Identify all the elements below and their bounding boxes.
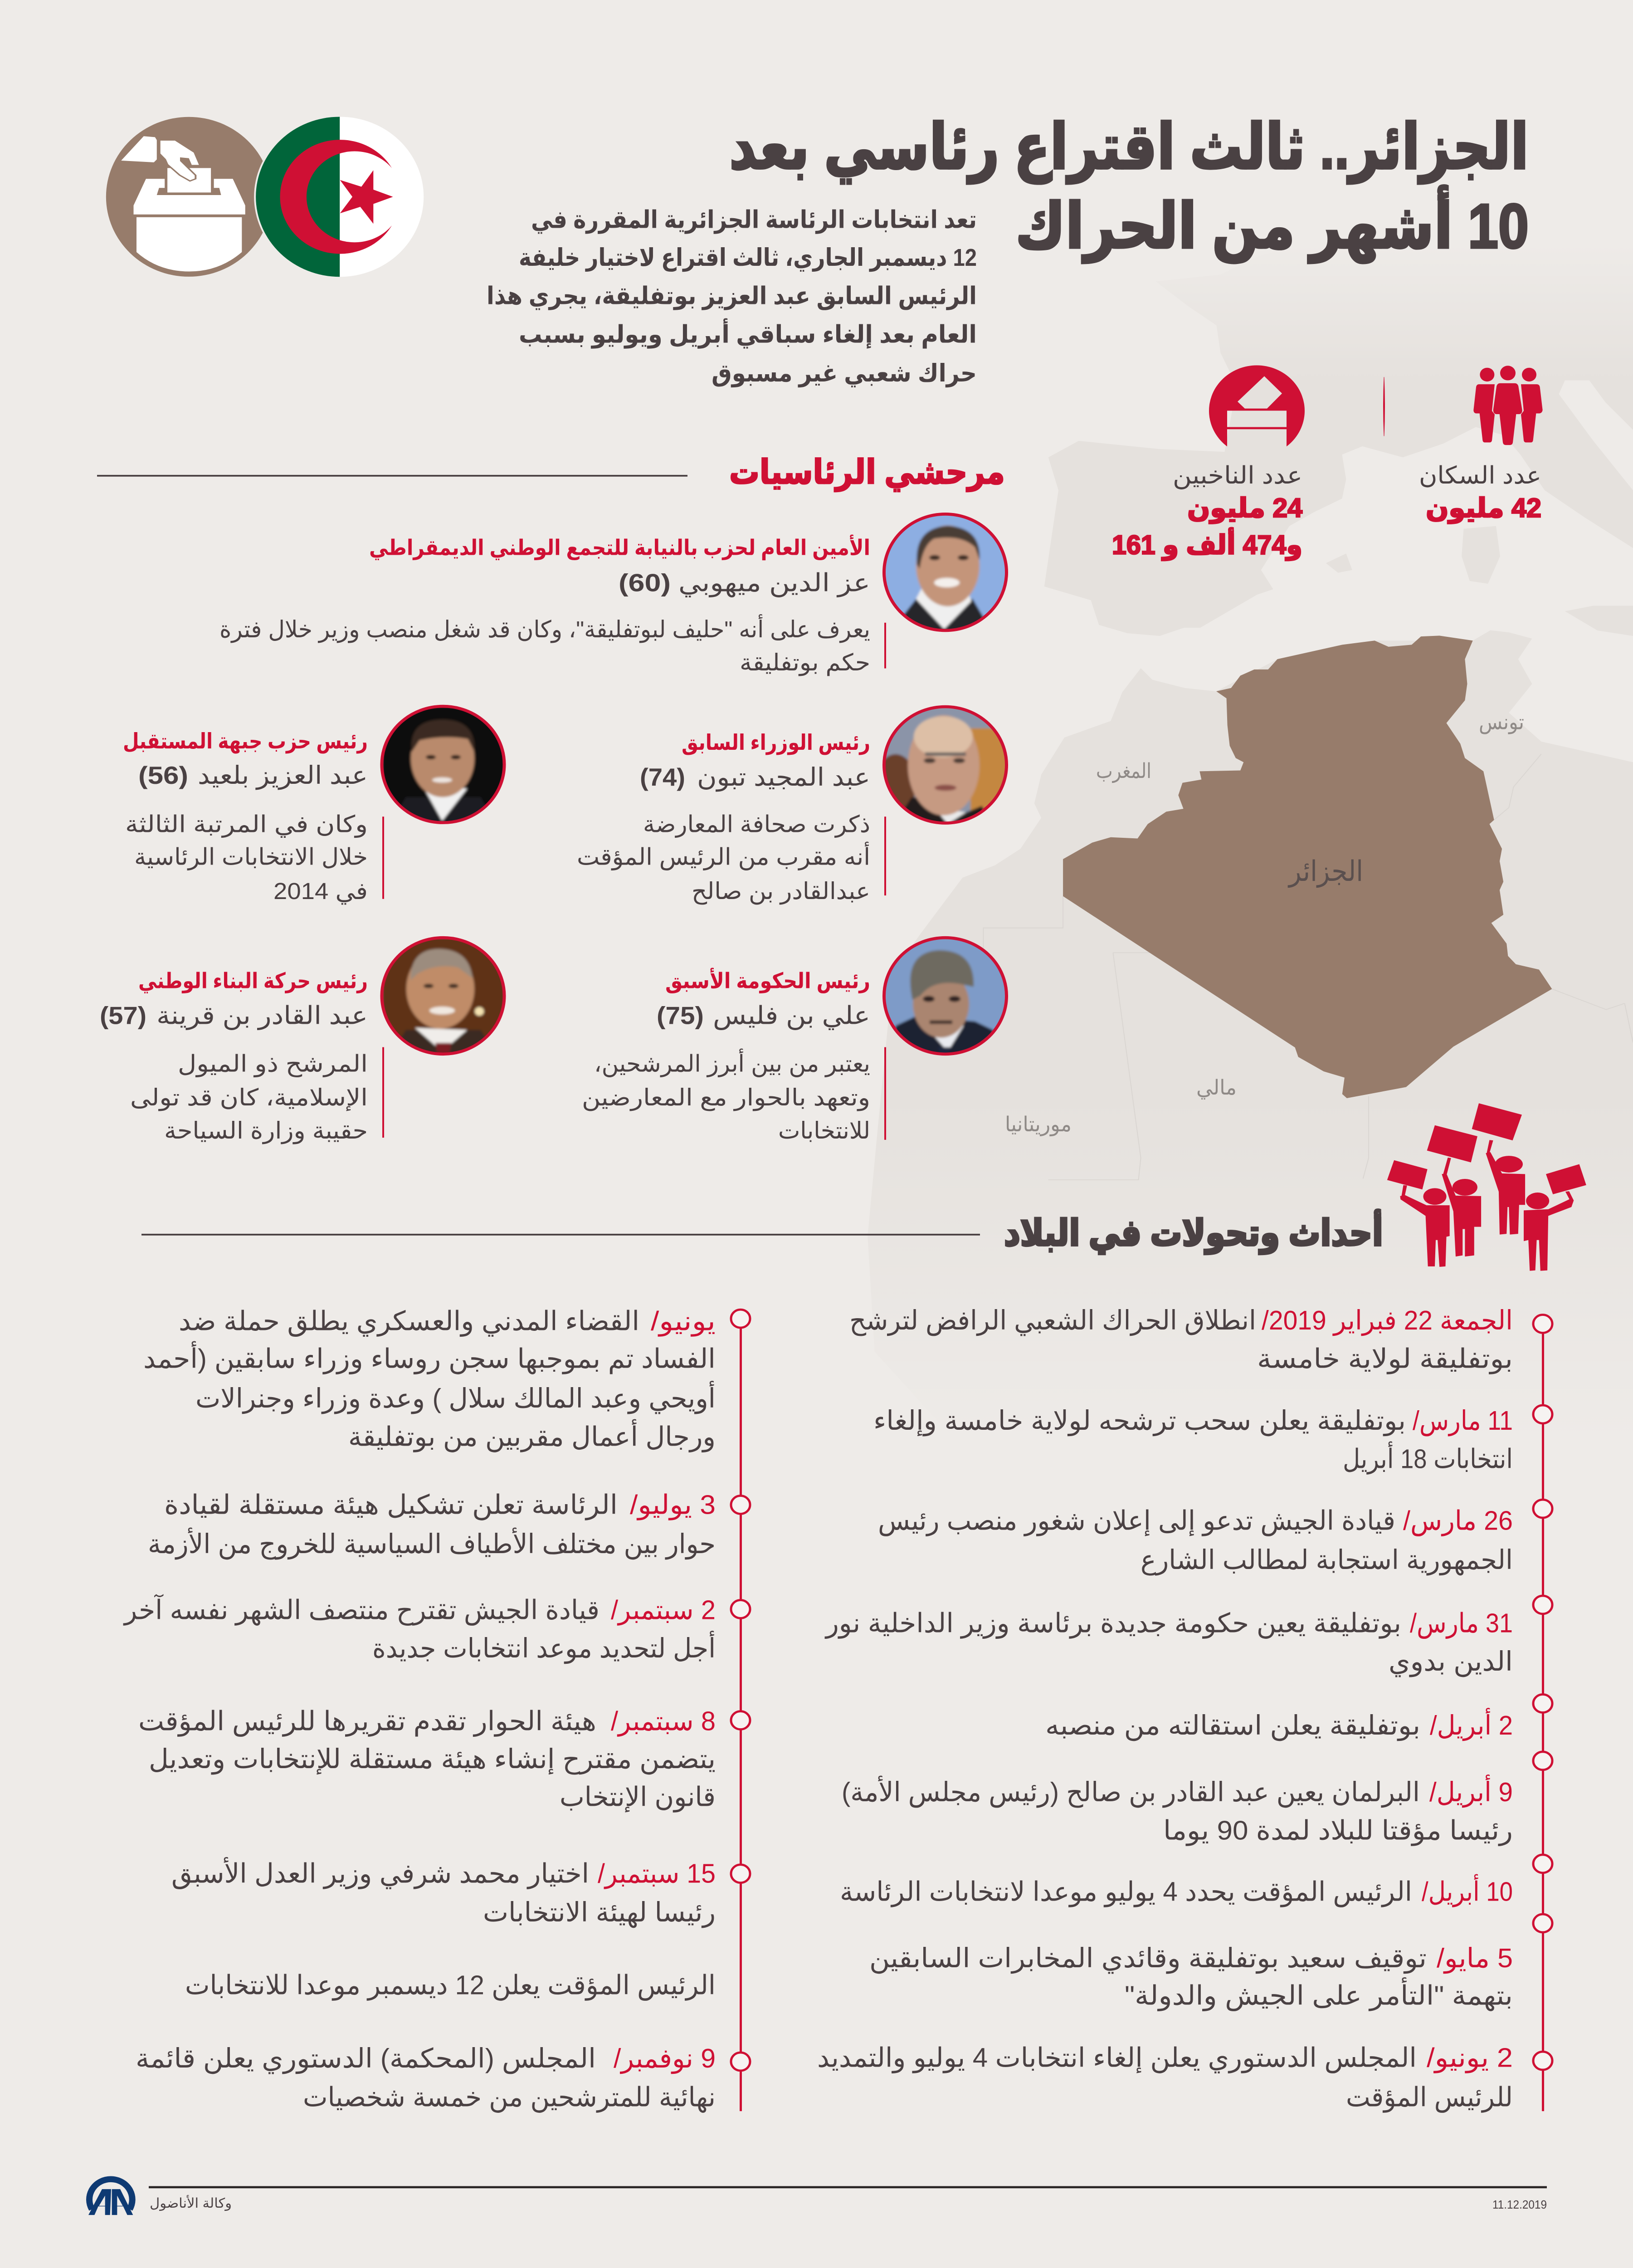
stat: registered voters: [1112, 365, 1305, 561]
candidate: Abdelmadjid Tebboune: أنه مقرب من الرئيس المؤقت: [577, 841, 870, 870]
event: 15 September: [171, 1857, 716, 1928]
candidate: Abdelaziz Belaid: (56): [138, 761, 188, 789]
map of Algeria: [1005, 635, 1552, 1137]
candidate: Abdelaziz Belaid: خلال الانتخابات الرئاسية: [134, 844, 368, 870]
footer: وكالة الأناضول: [150, 2195, 232, 2211]
candidate: Abdelmadjid Tebboune: عبد المجيد تبون: [697, 763, 870, 792]
candidate: Azzedine Mihoubi: [219, 513, 1009, 676]
event: 10 April: 10 أبريل/: [1422, 1874, 1513, 1907]
event: 2 April: بوتفليقة يعلن استقالته من منصبه: [1045, 1710, 1420, 1741]
event: 2 September: 2 سبتمبر/: [611, 1595, 716, 1626]
event: 9 April: [842, 1775, 1513, 1846]
candidate: Abdelmadjid Tebboune: [577, 707, 1008, 904]
event: 31 March: بوتفليقة يعين حكومة جديدة برئاسة وزير الداخلية نور: [824, 1608, 1401, 1639]
icon: ballot box and Algerian flag: [106, 116, 425, 278]
divider between stats: [1383, 377, 1385, 436]
map labels: [1005, 711, 1524, 1137]
stat: population: [1419, 366, 1543, 524]
event: 15 September: رئيسا لهيئة الانتخابات: [483, 1897, 716, 1928]
map labels: المغرب: [1096, 759, 1151, 783]
event: 9 April: البرلمان يعين عبد القادر بن صالح (رئيس مجلس الأمة): [842, 1776, 1420, 1808]
footer: 11.12.2019: [1492, 2198, 1547, 2211]
event: 8 September: [138, 1706, 716, 1813]
stat: population: 42 مليون: [1426, 493, 1541, 524]
candidate: Abdelmadjid Tebboune: (74): [640, 763, 685, 791]
event: 2 September: [123, 1594, 716, 1664]
event: 5 May: توقيف سعيد بوتفليقة وقائدي المخابرات السابقين: [869, 1943, 1427, 1974]
photo: Belaid: [382, 706, 505, 825]
event: 15 September: 15 سبتمبر/: [598, 1858, 716, 1889]
event: 8 September: قانون الإنتخاب: [560, 1782, 716, 1813]
event: 2 September: أجل لتحديد موعد انتخابات جديدة: [372, 1631, 716, 1664]
candidate: Ali Benflis: [582, 937, 1007, 1144]
photo: Bengrina: [382, 937, 505, 1056]
event: 22 February: بوتفليقة لولاية خامسة: [1257, 1344, 1513, 1374]
candidate: Azzedine Mihoubi: (60): [619, 569, 671, 596]
photo: Tebboune: [875, 707, 1008, 825]
event: 8 September: هيئة الحوار تقدم تقريرها للرئيس المؤقت: [138, 1706, 596, 1737]
background map: faint country borders: [983, 754, 1633, 1180]
intro text block: تعد انتخابات الرئاسة الجزائرية المقررة في: [531, 206, 977, 234]
event: June: الفساد تم بموجبها سجن روساء وزراء سابقين (أحمد: [143, 1341, 716, 1374]
candidate: Abdelmadjid Tebboune: ذكرت صحافة المعارضة: [643, 811, 870, 838]
heading: presidential candidates: [97, 454, 1005, 492]
event: June: القضاء المدني والعسكري يطلق حملة ضد: [179, 1306, 639, 1337]
icon: protesters with placards: [1387, 1103, 1586, 1271]
timeline events: left column: [123, 1306, 716, 2113]
event: 2 April: 2 أبريل/: [1430, 1708, 1513, 1741]
title: 10 أشهر من الحراك: [1015, 186, 1529, 263]
map labels: تونس: [1479, 711, 1524, 734]
event: 26 March: قيادة الجيش تدعو إلى إعلان شغور منصب رئيس: [878, 1505, 1395, 1536]
event: 22 February: [849, 1305, 1513, 1374]
event: 26 March: الجمهورية استجابة لمطالب الشارع: [1141, 1545, 1513, 1576]
candidate: Ali Benflis: للانتخابات: [778, 1118, 870, 1144]
event: 26 March: 26 مارس/: [1403, 1505, 1513, 1536]
candidate: Ali Benflis: رئيس الحكومة الأسبق: [665, 968, 870, 993]
candidate: Azzedine Mihoubi: الأمين العام لحزب بالنيابة للتجمع الوطني الديمقراطي: [369, 534, 870, 560]
event: 31 March: الدين بدوي: [1389, 1647, 1513, 1677]
candidate: Abdelaziz Belaid: في 2014: [273, 878, 368, 904]
candidate: Abdelmadjid Tebboune: عبدالقادر بن صالح: [692, 878, 870, 904]
candidate: Abdelkader Bengrina: رئيس حركة البناء الوطني: [138, 969, 368, 993]
candidate: Abdelkader Bengrina: (57): [100, 1002, 146, 1029]
map labels: مالي: [1196, 1076, 1237, 1100]
footer: [88, 2179, 1547, 2215]
event: 3 July: حوار بين مختلف الأطياف السياسية للخروج من الأزمة: [148, 1527, 716, 1560]
event: 3 July: 3 يوليو/: [630, 1490, 716, 1520]
stat: population: عدد السكان: [1419, 462, 1541, 489]
event: 22 February: انطلاق الحراك الشعبي الرافض لترشح: [849, 1305, 1256, 1336]
background map: neighbouring land: [868, 226, 1633, 1488]
event: 11 March: 11 مارس/: [1413, 1406, 1513, 1437]
event: June: [143, 1306, 716, 1452]
event: 9 April: رئيسا مؤقتا للبلاد لمدة 90 يوما: [1163, 1815, 1513, 1846]
timeline events: right column: [817, 1305, 1513, 2113]
candidate: Abdelkader Bengrina: [100, 937, 505, 1144]
candidate: Abdelkader Bengrina: عبد القادر بن قرينة: [156, 1002, 368, 1030]
intro text block: 12 ديسمبر الجاري، ثالث اقتراع لاختيار خليفة: [519, 244, 977, 272]
icon: ballot box in brown circle: [106, 117, 272, 277]
candidate: Azzedine Mihoubi: حكم بوتفليقة: [740, 650, 870, 676]
candidate: Ali Benflis: (75): [657, 1002, 704, 1029]
event: 9 November: 9 نوفمبر/: [614, 2043, 716, 2074]
event: 9 November: [136, 2043, 716, 2113]
icon: ballot in red circle: [1209, 365, 1305, 446]
event: June: يونيو/: [651, 1306, 716, 1337]
timeline axis: right column: [1533, 1315, 1552, 2111]
event: 9 April: 9 أبريل/: [1429, 1775, 1513, 1808]
timeline axis: left column: [731, 1310, 750, 2111]
event: June: أويحي وعبد المالك سلال ) وعدة وزراء وجنرالات: [195, 1381, 716, 1414]
candidate: Azzedine Mihoubi: عز الدين ميهوبي: [678, 569, 870, 597]
event: 3 July: الرئاسة تعلن تشكيل هيئة مستقلة لقيادة: [164, 1490, 618, 1520]
event: 5 May: بتهمة "التأمر على الجيش والدولة": [1125, 1977, 1513, 2011]
candidate: Ali Benflis: وتعهد بالحوار مع المعارضين: [582, 1085, 870, 1111]
event: 11 March: انتخابات 18 أبريل: [1343, 1442, 1513, 1475]
event: 9 November: نهائية للمترشحين من خمسة شخصيات: [303, 2082, 716, 2113]
event: 11 March: بوتفليقة يعلن سحب ترشحه لولاية خامسة وإلغاء: [873, 1406, 1406, 1437]
event: 2 June: 2 يونيو/: [1427, 2043, 1513, 2073]
intro text block: الرئيس السابق عبد العزيز بوتفليقة، يجري هذا: [487, 282, 977, 310]
candidate: Abdelaziz Belaid: رئيس حزب جبهة المستقبل: [123, 729, 368, 754]
event: 10 April: الرئيس المؤقت يحدد 4 يوليو موعدا لانتخابات الرئاسة: [840, 1877, 1412, 1907]
event: 8 September: يتضمن مقترح إنشاء هيئة مستقلة للإنتخابات وتعديل: [149, 1744, 716, 1775]
candidate: Abdelkader Bengrina: المرشح ذو الميول: [178, 1051, 368, 1077]
event: 31 March: [824, 1608, 1513, 1677]
event: 9 November: المجلس (المحكمة) الدستوري يعلن قائمة: [136, 2043, 596, 2074]
event: 2 June: المجلس الدستوري يعلن إلغاء انتخابات 4 يوليو والتمديد: [817, 2043, 1417, 2073]
stat: registered voters: 24 مليون: [1187, 493, 1302, 524]
photo: Benflis: [884, 937, 1007, 1056]
event: 8 September: 8 سبتمبر/: [611, 1706, 716, 1737]
event: 26 March: [878, 1505, 1513, 1576]
title: [729, 112, 1529, 263]
event: 5 May: 5 مايو/: [1437, 1943, 1513, 1974]
event: 3 July: [148, 1490, 716, 1560]
heading: events and developments: أحداث وتحولات في البلاد: [1004, 1209, 1383, 1255]
candidate: Abdelaziz Belaid: عبد العزيز بلعيد: [198, 761, 368, 790]
intro text block: العام بعد إلغاء سباقي أبريل ويوليو بسبب: [519, 318, 977, 349]
candidate: Abdelkader Bengrina: الإسلامية، كان قد تولى: [130, 1085, 368, 1111]
event: election date announced: الرئيس المؤقت يعلن 12 ديسمبر موعدا للانتخابات: [185, 1970, 716, 2001]
event: 22 February: الجمعة 22 فبراير 2019/: [1262, 1305, 1513, 1336]
event: June: ورجال أعمال مقربين من بوتفليقة: [348, 1419, 716, 1452]
map labels: الجزائر: [1287, 855, 1363, 888]
event: 2 June: للرئيس المؤقت: [1346, 2082, 1513, 2113]
heading: presidential candidates: مرحشي الرئاسيات: [729, 454, 1005, 492]
candidate: Abdelaziz Belaid: وكان في المرتبة الثالثة: [125, 811, 368, 838]
event: 11 March: [873, 1406, 1513, 1475]
stat: registered voters: عدد الناخبين: [1173, 462, 1302, 489]
event: 2 September: قيادة الجيش تقترح منتصف الشهر نفسه آخر: [123, 1594, 600, 1626]
stat: registered voters: و474 ألف و 161: [1112, 528, 1302, 561]
icon: Algerian flag circle: [254, 116, 425, 278]
candidate: Abdelmadjid Tebboune: رئيس الوزراء السابق: [682, 731, 870, 755]
intro text block: [487, 206, 977, 387]
photo: Mihoubi: [884, 513, 1009, 634]
map labels: موريتانيا: [1005, 1113, 1072, 1137]
icon: Anadolu Agency logo: [88, 2179, 133, 2215]
event: 31 March: 31 مارس/: [1410, 1608, 1513, 1639]
event: 15 September: اختيار محمد شرفي وزير العدل الأسبق: [171, 1857, 589, 1889]
candidate: Abdelaziz Belaid: [123, 706, 505, 904]
candidate: Abdelkader Bengrina: حقيبة وزارة السياحة: [164, 1118, 368, 1144]
candidate: Ali Benflis: علي بن فليس: [713, 1002, 870, 1030]
heading: events and developments: [141, 1209, 1383, 1255]
candidate: Ali Benflis: يعتبر من بين أبرز المرشحين،: [594, 1048, 870, 1077]
icon: three people: [1473, 366, 1543, 445]
event: 5 May: [869, 1943, 1513, 2011]
candidate: Azzedine Mihoubi: يعرف على أنه "حليف لبوتفليقة"، وكان قد شغل منصب وزير خلال فترة: [219, 614, 870, 643]
event: 2 June: [817, 2043, 1513, 2113]
intro text block: حراك شعبي غير مسبوق: [712, 359, 977, 387]
